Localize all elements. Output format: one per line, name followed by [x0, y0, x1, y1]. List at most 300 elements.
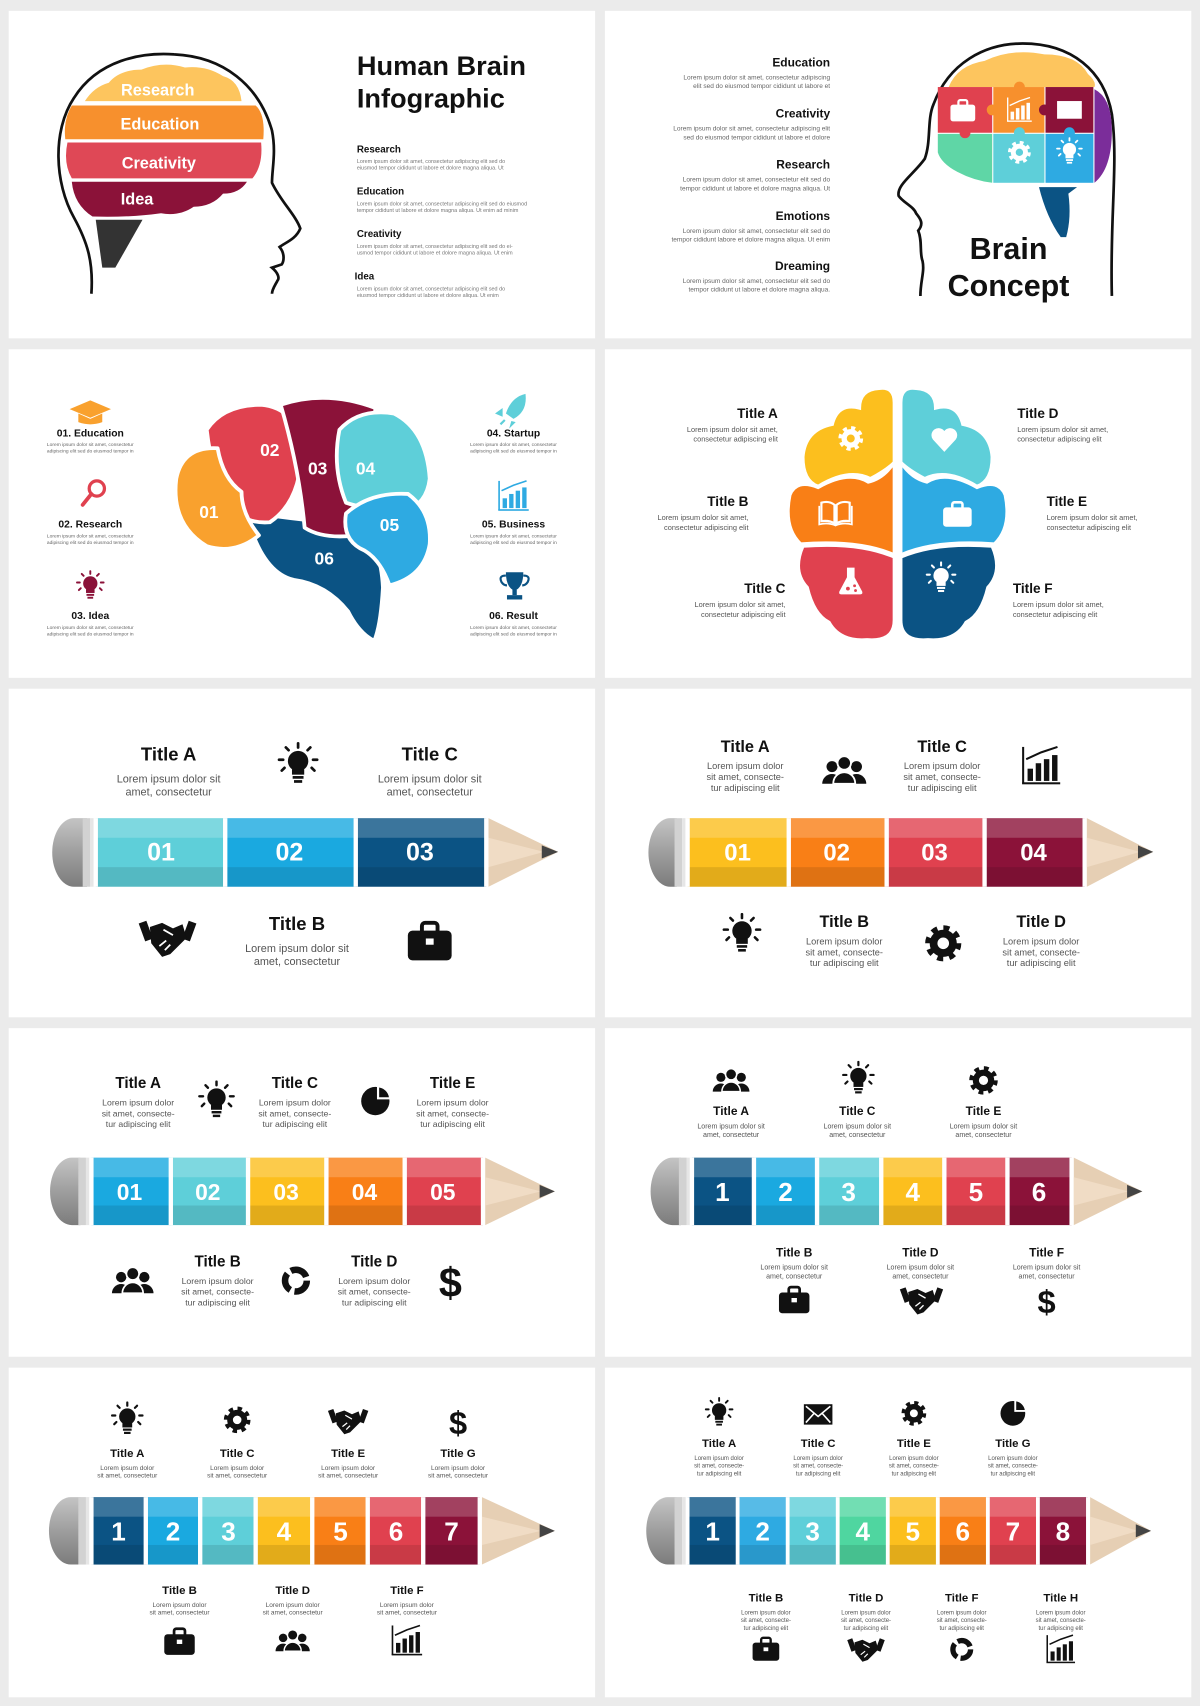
text block: title D: Title D [1016, 913, 1066, 931]
text block: title A: tur adipiscing elit [697, 1471, 742, 1477]
brain layer: creativity: Creativity [122, 155, 196, 173]
text blocks: left list: Education [772, 55, 830, 69]
pencil: 1 [715, 1177, 730, 1207]
text block: research: Lorem ipsum dolor sit amet, consectetur adipiscing elit sed do [357, 159, 505, 165]
icon: dollar: $ [439, 1260, 462, 1306]
icon: bulb [724, 914, 760, 952]
text block: title A [694, 1438, 744, 1477]
text block: title C: sit amet, consecte- [258, 1108, 331, 1118]
text block: title C: sit amet, consecte- [903, 772, 981, 782]
pencil: 01 [117, 1179, 142, 1205]
text block: title D: Lorem ipsum dolor [1003, 936, 1079, 946]
text block: title D [841, 1593, 891, 1632]
pencil: 4 [277, 1517, 292, 1547]
text block: title F: amet, consectetur [1019, 1273, 1075, 1280]
text block: title D: tur adipiscing elit [1007, 958, 1076, 968]
text block: research: Research [357, 144, 401, 155]
text block: title B [149, 1585, 210, 1617]
text block: title D: sit amet, consecte- [841, 1618, 891, 1624]
pencil: 04 [1020, 840, 1048, 867]
text block: title A: Lorem ipsum dolor sit [117, 773, 221, 785]
text block: title C [258, 1075, 331, 1129]
icon: chart [1022, 747, 1060, 784]
text block: title B: sit amet, consectetur [149, 1610, 210, 1617]
pencil: 8 [1056, 1517, 1070, 1547]
text block: title C: Lorem ipsum dolor [259, 1097, 331, 1107]
text blocks: right labels: Lorem ipsum dolor sit amet, consectetur [470, 442, 557, 448]
icon: magnifier [83, 481, 104, 505]
text block: title A: Lorem ipsum dolor sit [697, 1123, 765, 1130]
text block: title D: Title D [849, 1593, 883, 1605]
text block: title E: Lorem ipsum dolor [417, 1097, 489, 1107]
text block: idea: Lorem ipsum dolor sit amet, consectetur adipiscing elit sed do [357, 286, 505, 292]
text block: title C: tur adipiscing elit [908, 783, 977, 793]
text block: education: tempor cididunt ut labore et dolore magna aliqua. Ut enim ad minim [357, 208, 519, 214]
icon: briefcase [164, 1629, 195, 1655]
text block: title B: tur adipiscing elit [810, 958, 879, 968]
brain stem [96, 220, 143, 268]
pencil: 01 [147, 839, 175, 867]
text block: title B: sit amet, consecte- [181, 1287, 254, 1297]
text block: title D: tur adipiscing elit [844, 1626, 889, 1632]
brain layer: research [85, 65, 242, 101]
text block: title G [988, 1438, 1038, 1477]
text block: title B [741, 1593, 791, 1632]
icon: envelope [804, 1404, 832, 1425]
text block: title H: tur adipiscing elit [1039, 1626, 1083, 1632]
text block: title C: Title C [839, 1104, 876, 1118]
pencil: 2 [166, 1517, 180, 1547]
pencil: 02 [275, 839, 303, 867]
pencil [651, 1158, 1142, 1225]
text blocks: left list [671, 55, 830, 294]
icon: trophy [501, 572, 529, 599]
text block: title C: Title C [917, 738, 967, 756]
icon: chart [392, 1625, 422, 1655]
text block: title B: amet, consectetur [254, 956, 341, 968]
segment numbers: 06 [315, 549, 334, 569]
text block: title E: amet, consectetur [955, 1132, 1012, 1139]
segment numbers: 01 [199, 502, 219, 522]
pencil: 5 [969, 1177, 983, 1207]
text block: title E: Lorem ipsum dolor [321, 1465, 376, 1472]
text block: title D: tur adipiscing elit [342, 1298, 407, 1308]
pencil: 1 [705, 1517, 720, 1547]
icon: chart [1046, 1635, 1075, 1663]
text block: title B [760, 1246, 828, 1280]
text block: title E: Title E [331, 1448, 366, 1460]
text block: title B: Title B [819, 913, 869, 931]
text block: title C: sit amet, consectetur [207, 1473, 268, 1480]
brain segments [176, 398, 430, 641]
brain layer: education: Education [121, 115, 199, 133]
text block: title D: sit amet, consectetur [263, 1610, 324, 1617]
text block: title B: Lorem ipsum dolor [806, 936, 882, 946]
pencil: 3 [805, 1517, 820, 1547]
pencil: 2 [778, 1177, 793, 1207]
text block: title A: Lorem ipsum dolor [102, 1097, 174, 1107]
text block: title B: Lorem ipsum dolor [741, 1611, 791, 1617]
panel: six-part brain: consectetur adipiscing elit [1013, 610, 1097, 619]
text blocks: titles A-F: Title C [744, 581, 786, 596]
panel: six-part brain: consectetur adipiscing elit [693, 435, 778, 444]
text block: title C: Lorem ipsum dolor sit [824, 1123, 891, 1130]
panel: 4-step pencil [605, 689, 1191, 1017]
icon: gear [929, 929, 957, 958]
icon: pie [361, 1085, 392, 1115]
text blocks: titles A-F [707, 406, 1087, 596]
text block: title A: Title A [713, 1104, 749, 1118]
panel: 3-step pencil [9, 689, 595, 1017]
text block: title G: sit amet, consectetur [428, 1473, 489, 1480]
text block: title G: tur adipiscing elit [991, 1471, 1035, 1477]
text block: title A: tur adipiscing elit [711, 783, 780, 793]
panel: six-part brain [605, 349, 1191, 678]
text blocks: titles A-F: Title D [1017, 406, 1059, 421]
pencil: 4 [906, 1177, 921, 1207]
text blocks: left list: tempor cididunt ut labore et dolore magna aliqua. [688, 287, 830, 294]
brain icons [819, 428, 972, 594]
text block: title H: Title H [1043, 1593, 1078, 1605]
text block: creativity: Lorem ipsum dolor sit amet, consectetur adipiscing elit sed do ei- [357, 244, 513, 250]
text block: title B: sit amet, consecte- [805, 947, 883, 957]
pencil: 7 [1006, 1517, 1020, 1547]
pencil [52, 818, 558, 887]
text blocks: left list: elit sed do eiusmod tempor cididunt ut labore et [693, 83, 830, 90]
text block: title E: Title E [966, 1104, 1001, 1118]
icon: pie [1000, 1399, 1027, 1426]
text blocks: left list: sed do eiusmod tempor cididunt ut labore et dolore [683, 134, 830, 141]
text blocks: left list: Research [776, 158, 830, 172]
brain layer: creativity [66, 143, 261, 178]
text block: creativity: usmod tempor cididunt ut labore et dolore magna aliqua. Ut enim [357, 251, 513, 257]
icon: handshake [328, 1409, 368, 1434]
text block: title G: sit amet, consecte- [988, 1464, 1038, 1470]
text block: title A [102, 1075, 175, 1129]
text block: title D [263, 1585, 324, 1617]
pencil: 4 [855, 1517, 870, 1547]
brain layer: idea: Idea [121, 191, 154, 209]
text block: title F: tur adipiscing elit [940, 1626, 984, 1632]
head outline [58, 54, 300, 294]
text block: title D: Title D [351, 1253, 397, 1270]
text block: title E: Title E [430, 1075, 475, 1092]
pencil: 03 [406, 839, 434, 867]
icon: handshake [847, 1638, 885, 1662]
text block: title G: Title G [440, 1448, 476, 1460]
panel: six-part brain: consectetur adipiscing elit [664, 523, 749, 532]
text block: education: Education [357, 187, 404, 198]
text block: title H: Lorem ipsum dolor [1036, 1611, 1085, 1617]
segment numbers: 02 [260, 440, 279, 460]
text block: title B: Title B [162, 1585, 197, 1597]
icon: bulb [706, 1398, 732, 1426]
text block: title C: Title C [801, 1438, 835, 1450]
text blocks: left list: Lorem ipsum dolor sit amet, consectetur adipiscing [683, 74, 830, 81]
panel: six-part brain: Lorem ipsum dolor sit amet, [687, 425, 778, 434]
brain left half [788, 388, 894, 640]
text block: title C: sit amet, consecte- [793, 1464, 843, 1470]
text blocks: titles A-F: Title A [737, 406, 778, 421]
text blocks: left labels: Lorem ipsum dolor sit amet, consectetur [47, 625, 134, 631]
text block: title A: Lorem ipsum dolor [707, 761, 783, 771]
panel: six-part brain: Lorem ipsum dolor sit amet, [694, 600, 785, 609]
text blocks: left labels: 01. Education [57, 428, 124, 439]
text block: title F [377, 1585, 438, 1617]
brain layer: education [65, 106, 264, 139]
text block: title C [207, 1448, 268, 1480]
text blocks: left labels: adipiscing elit sed do eiusmod tempor in [47, 631, 134, 637]
pencil: 03 [273, 1179, 299, 1205]
text block: title A [97, 1448, 158, 1480]
text block: title A: sit amet, consecte- [706, 772, 784, 782]
text block: title F: Title F [1029, 1246, 1064, 1260]
text block: title D [1002, 913, 1080, 968]
icon: bulb [199, 1082, 234, 1117]
icon: gear [972, 1069, 995, 1092]
text blocks: titles A-F: Title E [1047, 494, 1087, 509]
text blocks: right labels [470, 428, 557, 637]
pencil: 6 [956, 1517, 970, 1547]
text block: education [357, 187, 527, 214]
text block: creativity [357, 229, 513, 257]
text block: title E [950, 1104, 1017, 1139]
text block: title D: amet, consectetur [892, 1273, 949, 1280]
text block: title B: Title B [269, 913, 325, 934]
pencil: 3 [221, 1517, 236, 1547]
panel: six-part brain: Lorem ipsum dolor sit amet, [658, 513, 749, 522]
pencil: 5 [906, 1517, 920, 1547]
text block: title C: amet, consectetur [387, 786, 473, 798]
icon: dollar: $ [449, 1404, 467, 1441]
title: Infographic [357, 83, 505, 114]
text block: title A: Title A [141, 744, 196, 765]
text block: title B [181, 1253, 254, 1308]
text block: title B: Title B [776, 1246, 813, 1260]
text blocks: left list: tempor cididunt ut labore et dolore magna aliqua. Ut [680, 185, 830, 192]
text block: title C: tur adipiscing elit [796, 1471, 841, 1477]
text block: title A [117, 744, 221, 798]
icon: graduation cap [70, 400, 111, 424]
icon: cycle [953, 1641, 971, 1658]
pencil [646, 1497, 1151, 1565]
text blocks: right labels: adipiscing elit sed do eiusmod tempor in [470, 449, 557, 455]
text block: title B: Lorem ipsum dolor sit [760, 1265, 828, 1272]
text blocks: left list: Emotions [776, 209, 830, 223]
text blocks: right labels: Lorem ipsum dolor sit amet, consectetur [470, 533, 557, 539]
text block: title E: Lorem ipsum dolor sit [950, 1123, 1017, 1130]
pencil [49, 1497, 555, 1565]
text block: title E: sit amet, consecte- [416, 1108, 489, 1118]
icon: idea bulb [77, 571, 104, 599]
pencil [648, 818, 1153, 887]
text blocks: left list: Creativity [776, 107, 830, 121]
text block: title B: tur adipiscing elit [185, 1298, 251, 1308]
icon: people [112, 1267, 154, 1293]
text block: title A: tur adipiscing elit [106, 1119, 171, 1129]
text block: title A: sit amet, consectetur [97, 1473, 158, 1480]
text block: title F: Lorem ipsum dolor sit [1013, 1265, 1080, 1272]
segment numbers [199, 440, 399, 569]
text block: title F: Lorem ipsum dolor [380, 1602, 435, 1609]
text block: title A: sit amet, consecte- [694, 1464, 744, 1470]
panel: 6-step pencil [605, 1028, 1191, 1357]
pencil: 05 [430, 1179, 456, 1205]
text block: idea [355, 272, 505, 299]
text block: title C [793, 1438, 843, 1477]
text block: title F: Title F [945, 1593, 978, 1605]
text block: title B: Lorem ipsum dolor sit [245, 943, 349, 955]
panel: numbered brain [9, 349, 595, 678]
text blocks: titles A-F: Title B [707, 494, 749, 509]
text blocks: left list: Lorem ipsum dolor sit amet, consectetur elit sed do [683, 278, 830, 285]
text block: title B: tur adipiscing elit [744, 1626, 788, 1632]
text block: title D: Lorem ipsum dolor [841, 1611, 891, 1617]
text block: title D: Lorem ipsum dolor [266, 1602, 320, 1609]
pencil: 6 [389, 1517, 403, 1547]
puzzle brain [938, 52, 1112, 183]
panel: six-part brain: Lorem ipsum dolor sit amet, [1047, 513, 1138, 522]
panel: six-part brain: Lorem ipsum dolor sit amet, [1013, 600, 1104, 609]
text blocks: left labels: adipiscing elit sed do eiusmod tempor in [47, 540, 134, 546]
icon: people [822, 756, 866, 784]
text block: title D: Title D [275, 1585, 310, 1597]
title: Human Brain [357, 50, 526, 81]
text blocks: right labels: adipiscing elit sed do eiusmod tempor in [470, 631, 557, 637]
panel: six-part brain: consectetur adipiscing elit [701, 610, 785, 619]
text block: idea: Idea [355, 272, 375, 283]
text blocks: left list: Lorem ipsum dolor sit amet, consectetur elit sed do [683, 177, 830, 184]
text blocks: right labels: 04. Startup [487, 428, 540, 439]
panel: 5-step pencil [9, 1028, 595, 1357]
text block: education: Lorem ipsum dolor sit amet, consectetur adipiscing elit sed do eiusmod [357, 202, 527, 208]
text block: title D: sit amet, consecte- [1002, 947, 1080, 957]
text block: title C: Lorem ipsum dolor sit [378, 773, 482, 785]
text block: title C [378, 744, 482, 798]
icon: bulb [112, 1402, 143, 1434]
text block: title H [1036, 1593, 1086, 1632]
text block: title C: Lorem ipsum dolor [904, 761, 980, 771]
icon: handshake [900, 1287, 943, 1314]
icon: people [276, 1630, 310, 1651]
text block: title A: Title A [721, 738, 770, 756]
pencil: 2 [755, 1517, 770, 1547]
text block: title D: Title D [902, 1246, 939, 1260]
text block: title A [706, 738, 784, 793]
panel: human brain infographic [9, 11, 595, 338]
text blocks: left labels: adipiscing elit sed do eiusmod tempor in [47, 449, 134, 455]
text block: title C: Lorem ipsum dolor [793, 1456, 843, 1462]
text block: title C: Title C [402, 744, 458, 765]
icon: handshake [139, 921, 196, 957]
text block: title F: Lorem ipsum dolor [937, 1611, 986, 1617]
pencil: 3 [841, 1177, 856, 1207]
text block: title F: sit amet, consectetur [377, 1610, 438, 1617]
panel: six-part brain: consectetur adipiscing elit [1017, 435, 1102, 444]
segment numbers: 03 [308, 458, 328, 478]
text block: title C: tur adipiscing elit [262, 1119, 328, 1129]
panel: brain concept [605, 11, 1191, 338]
text block: title A: Lorem ipsum dolor [100, 1465, 155, 1472]
panel: six-part brain: consectetur adipiscing elit [1047, 523, 1131, 532]
text block: title G: Title G [995, 1438, 1031, 1450]
text block: title E [889, 1438, 939, 1477]
panel: 7-step pencil [9, 1368, 595, 1697]
pencil: 5 [333, 1517, 348, 1547]
text block: creativity: Creativity [357, 229, 402, 240]
text block: title A [697, 1104, 765, 1139]
icon: briefcase [753, 1638, 779, 1661]
head outline [898, 44, 1114, 296]
text blocks: left list: tempor cididunt labore et dolore magna aliqua. Ut enim [671, 237, 830, 244]
text block: title E [318, 1448, 379, 1480]
text block: title F: Title F [390, 1585, 424, 1597]
text block: title D [338, 1253, 411, 1308]
icon: cycle [285, 1270, 307, 1291]
text blocks: left list: Lorem ipsum dolor sit amet, consectetur adipiscing elit [673, 126, 830, 133]
brain right half [901, 388, 1007, 640]
text block: title A: sit amet, consecte- [102, 1108, 175, 1118]
text blocks: left list: Lorem ipsum dolor sit amet, consectetur elit sed do [683, 228, 830, 235]
text block: title E: Title E [897, 1438, 931, 1450]
text blocks: titles A-F: Title F [1013, 581, 1053, 596]
text block: title B: Title B [194, 1253, 241, 1270]
text block: title C [903, 738, 981, 793]
title [357, 50, 526, 114]
text block: title B [805, 913, 883, 968]
title: Concept [948, 269, 1069, 303]
text block: title B: Lorem ipsum dolor [153, 1602, 207, 1609]
brain layer: research: Research [121, 82, 194, 100]
text block: title D [887, 1246, 954, 1280]
text block: title D: Lorem ipsum dolor [338, 1276, 410, 1286]
text block: title F: sit amet, consecte- [937, 1618, 987, 1624]
text blocks: left list: Dreaming [775, 259, 830, 273]
icon: business chart [498, 481, 529, 511]
text block: title B: amet, consectetur [766, 1273, 823, 1280]
icon: briefcase [779, 1287, 809, 1313]
text blocks: left labels [47, 428, 134, 637]
text block: title H: sit amet, consecte- [1036, 1618, 1086, 1624]
pencil: 1 [111, 1517, 126, 1547]
text block: title E: sit amet, consectetur [318, 1473, 379, 1480]
text block: title B: sit amet, consecte- [741, 1618, 791, 1624]
pencil: 6 [1032, 1177, 1046, 1207]
text block: title C: Lorem ipsum dolor [210, 1465, 265, 1472]
text block: title E [416, 1075, 489, 1129]
text block: title A: Lorem ipsum dolor [694, 1456, 744, 1462]
panel: six-part brain: Lorem ipsum dolor sit amet, [1017, 425, 1108, 434]
text block: idea: eiusmod tempor cididunt ut labore et dolore aliqua. Ut enim [357, 293, 499, 299]
pencil: 03 [921, 840, 948, 867]
text block: title A: amet, consectetur [125, 786, 212, 798]
text blocks: right labels: adipiscing elit sed do eiusmod tempor in [470, 540, 557, 546]
text block: title E: Lorem ipsum dolor [889, 1456, 939, 1462]
pencil: 04 [352, 1179, 377, 1205]
panel: 8-step pencil [605, 1368, 1191, 1697]
icon: dollar: $ [1038, 1283, 1056, 1320]
text blocks: right labels: 05. Business [482, 520, 545, 531]
brain stem [1039, 187, 1077, 237]
icon: rocket [495, 394, 526, 429]
icon: gear [904, 1404, 924, 1423]
pencil: 7 [444, 1517, 459, 1547]
text block: title A: Title A [115, 1075, 161, 1092]
text blocks: left labels: 03. Idea [71, 611, 109, 622]
pencil: 02 [823, 840, 850, 867]
text block: title D: Lorem ipsum dolor sit [887, 1265, 954, 1272]
text block: title C: Title C [220, 1448, 254, 1460]
